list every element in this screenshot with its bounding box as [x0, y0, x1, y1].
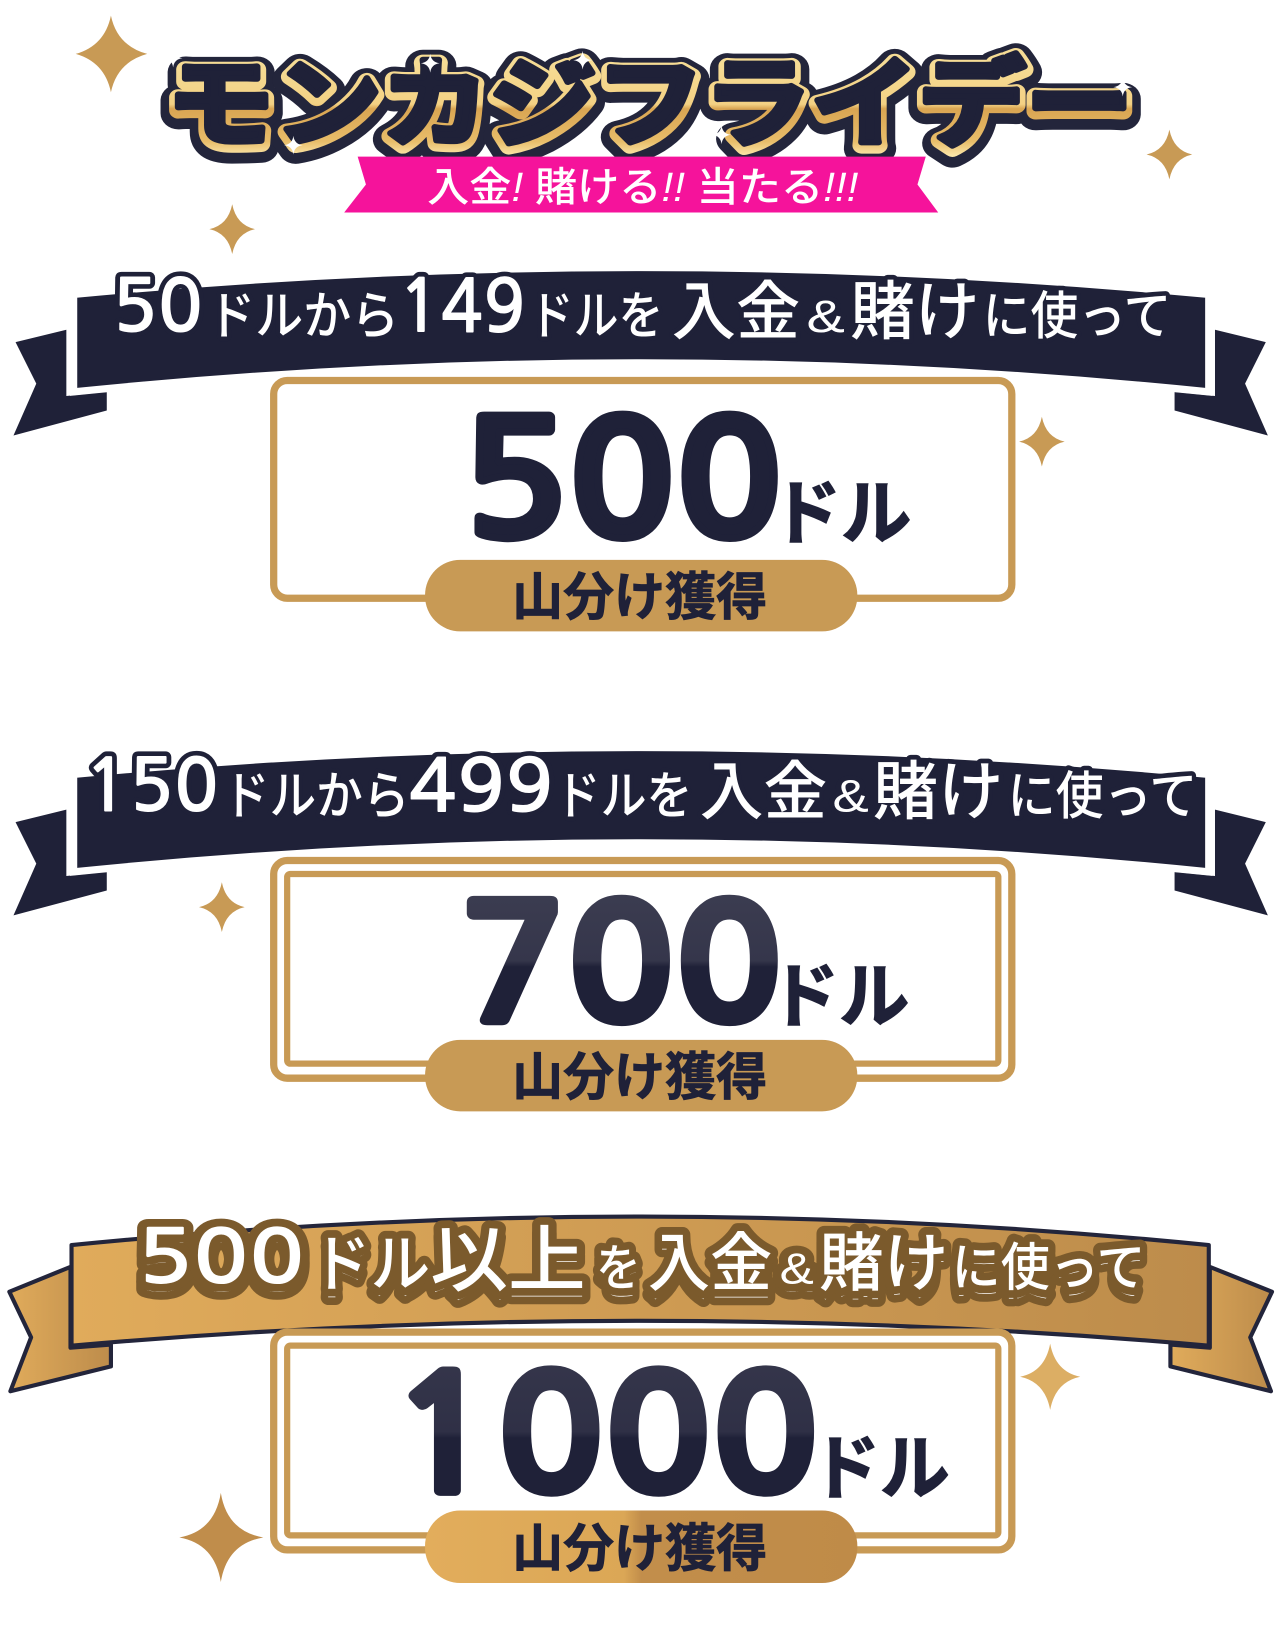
tier 2 condition text: 賭け — [873, 756, 1004, 828]
tier 2 pill label: 山分け獲得 — [512, 1048, 767, 1106]
sparkle: left of tier 3 box — [179, 1493, 263, 1582]
tier 2 condition text: & — [832, 771, 869, 822]
sparkle: below title left — [209, 204, 255, 254]
subtitle pink banner: 入金! 賭ける!! 当たる!!! — [427, 164, 858, 210]
tier 3 condition text: 以上 — [430, 1229, 586, 1310]
tier 1 prize box — [274, 380, 1012, 631]
tier 1 prize amount: 500 — [461, 402, 783, 561]
tier 3 condition text: 以上 — [430, 1221, 586, 1302]
sparkle: top left — [76, 16, 147, 92]
tier 2 condition text: ドルから — [223, 767, 409, 825]
tier 3 condition text: を — [596, 1241, 641, 1297]
title glints — [164, 49, 1132, 154]
sparkle: right of tier 3 box — [1020, 1344, 1080, 1410]
tier 3 condition text: ドル — [311, 1239, 430, 1308]
tier 1 ribbon — [13, 267, 1268, 435]
tier 1 condition text: 50 — [112, 271, 203, 343]
sparkle: left of tier 2 box — [199, 882, 245, 932]
tier 2 condition text: ドルを — [555, 767, 693, 825]
tier 3 pill label — [425, 1510, 857, 1583]
title: モンカジフライデー — [167, 50, 1133, 159]
tier 3 condition text: 賭け — [819, 1228, 949, 1300]
tier 3 prize box — [274, 1332, 1012, 1583]
tier 2 prize amount: 700 — [459, 886, 783, 1045]
tier 3 condition text: に使って — [952, 1247, 1146, 1305]
tier 3 pill label: 山分け獲得 — [512, 1519, 767, 1577]
tier 2 condition text: 150 — [84, 751, 219, 823]
tier 1 condition text: 賭け — [850, 276, 980, 348]
tier 1 condition text: ドルから — [207, 287, 399, 345]
tier 2 condition text: 499 — [408, 751, 554, 823]
tier 3 condition text: 500 — [137, 1230, 305, 1304]
tier 1 condition text — [112, 271, 1171, 348]
title: モンカジフライデー — [167, 53, 1133, 162]
tier 3 prize amount: 1000 — [390, 1357, 819, 1516]
tier 3 condition text: 入金 — [648, 1228, 772, 1300]
tier 1 condition text: ドルを — [529, 287, 663, 345]
tier 3 condition text — [137, 1221, 1146, 1310]
tier 1 pill label: 山分け獲得 — [512, 568, 767, 626]
tier 3 condition text: & — [780, 1245, 814, 1293]
tier 2 prize box — [274, 860, 1012, 1111]
tier 2 pill label — [425, 1040, 857, 1111]
tier 2 condition text: に使って — [1008, 767, 1197, 825]
title: モンカジフライデー — [167, 56, 1133, 165]
tier 1 prize amount: ドル — [771, 474, 911, 553]
tier 1 prize amount — [461, 402, 911, 561]
tier 2 prize amount — [459, 886, 909, 1045]
tier 3 condition text: & — [780, 1254, 814, 1302]
tier 1 condition text: 入金 — [672, 276, 800, 348]
sparkle: right of title — [1147, 130, 1192, 179]
tier 3 condition text: 入金 — [648, 1236, 772, 1308]
tier 3 prize amount — [390, 1357, 950, 1516]
tier 1 pill label — [425, 560, 857, 631]
tier 1 condition text: 149 — [398, 271, 526, 343]
tier 1 condition text: に使って — [983, 287, 1171, 345]
tier 2 ribbon — [13, 747, 1268, 915]
tier 3 condition text: を — [596, 1249, 641, 1305]
tier 1 condition text: & — [807, 291, 845, 342]
subtitle pink banner — [344, 157, 938, 213]
tier 3 condition text: に使って — [952, 1239, 1146, 1297]
sparkle: right of tier 1 box — [1019, 417, 1065, 467]
tier 3 condition text: ドル — [311, 1231, 430, 1300]
tier 2 prize amount: ドル — [769, 957, 909, 1036]
tier 3 gold ribbon — [9, 1217, 1272, 1391]
tier 3 condition text: 賭け — [819, 1236, 949, 1308]
tier 3 condition text: 500 — [137, 1221, 305, 1295]
tier 2 condition text — [84, 751, 1197, 828]
tier 3 prize amount: ドル — [811, 1429, 950, 1508]
tier 2 condition text: 入金 — [700, 756, 827, 828]
